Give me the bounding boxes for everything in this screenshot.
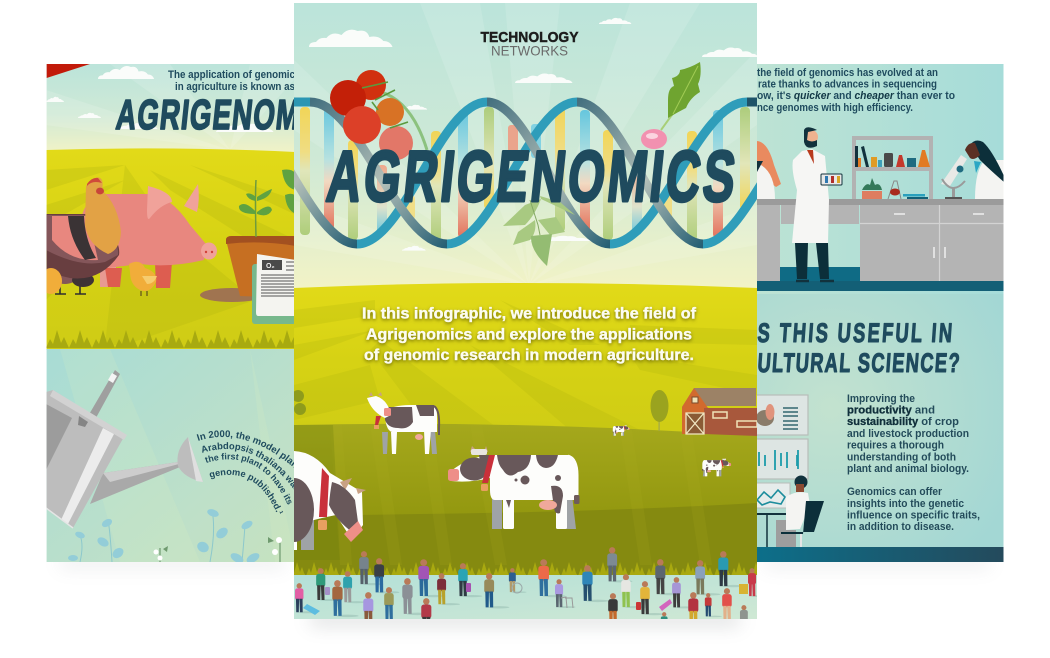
right intro text xyxy=(757,67,955,114)
left field stripes xyxy=(46,165,296,345)
right body text: Genomics can offer xyxy=(847,486,943,498)
book xyxy=(252,254,296,324)
curved caption text: genome published.¹ xyxy=(210,470,284,514)
curved caption text: Arabdopsis thaliana was xyxy=(202,442,294,490)
right body text: productivity and xyxy=(847,405,935,417)
right body text: understanding of both xyxy=(847,451,956,463)
left clouds xyxy=(46,66,274,132)
left bottom section background xyxy=(46,349,296,563)
DNA rungs xyxy=(300,107,750,241)
floor with crowd xyxy=(294,575,757,620)
field stripes xyxy=(294,300,757,430)
logo: Technology Networks: NETWORKS xyxy=(491,42,568,58)
potted plant xyxy=(862,178,928,200)
cow: distant xyxy=(613,425,630,436)
left intro text: The application of genomic xyxy=(168,69,295,81)
plant pot xyxy=(200,170,296,302)
cow: small right xyxy=(702,458,731,476)
lab bench xyxy=(756,199,1004,281)
right body text xyxy=(847,393,980,533)
cow: grazing lower left xyxy=(274,451,366,550)
right body text: influence on specific traits, xyxy=(847,509,980,521)
left grass xyxy=(46,330,294,348)
hanging leaves xyxy=(503,196,575,266)
right footer band xyxy=(756,547,1004,562)
right intro text: the field of genomics has evolved at an xyxy=(757,67,938,79)
curved caption text: the first plant to have its xyxy=(204,452,292,504)
pig xyxy=(78,184,217,288)
left intro text: in agriculture is known as xyxy=(175,81,295,93)
left title: AGRIGENOMICS xyxy=(114,91,351,138)
left shade on field xyxy=(294,425,340,560)
panel: centre cover page xyxy=(225,3,770,636)
right body text: and livestock production xyxy=(847,428,969,440)
right intro text: nce genomes with high efficiency. xyxy=(757,102,913,114)
intro paragraph xyxy=(362,306,697,364)
panel: right page xyxy=(752,64,1004,562)
watering can xyxy=(46,370,203,528)
bottom rays xyxy=(60,349,296,562)
scientist at microscope xyxy=(965,141,1004,199)
monitor: turkey xyxy=(752,395,808,435)
curved caption text xyxy=(196,430,294,514)
lab shelf xyxy=(852,136,933,199)
monitor: molecule xyxy=(752,483,790,508)
blue plants xyxy=(68,508,261,565)
panel: left page xyxy=(46,64,294,562)
upper yellow field xyxy=(294,283,757,440)
intro paragraph: In this infographic, we introduce the field of xyxy=(362,306,697,322)
curved caption text: In 2000, the model plant xyxy=(196,430,294,468)
chicks xyxy=(40,262,157,296)
right body text: in addition to disease. xyxy=(847,521,954,533)
left intro text xyxy=(168,69,295,93)
right heading: ULTURAL SCIENCE? xyxy=(757,347,961,378)
left sky xyxy=(46,64,296,154)
right body text: Improving the xyxy=(847,393,915,405)
right intro text: ow, it's quicker and cheaper than ever to xyxy=(757,90,955,102)
right heading: S THIS USEFUL IN xyxy=(757,317,953,348)
DNA helix xyxy=(225,102,770,244)
cow: top left xyxy=(367,392,439,454)
scientist holding tablet xyxy=(792,127,842,281)
centre sky xyxy=(294,3,757,288)
scientist with red hair xyxy=(757,141,781,199)
microscope xyxy=(941,155,967,199)
tree xyxy=(650,390,668,431)
red corner ribbon xyxy=(47,64,90,78)
logo: Technology Networks: TECHNOLOGY xyxy=(480,30,579,46)
right body text: plant and animal biology. xyxy=(847,463,969,475)
white flowers xyxy=(154,537,282,562)
cow: large centre xyxy=(448,446,580,529)
green field band xyxy=(294,424,757,520)
desk scientist xyxy=(757,476,824,547)
right heading xyxy=(758,322,960,373)
hen xyxy=(85,177,121,254)
crowd of people xyxy=(295,547,769,636)
turkey xyxy=(46,214,119,294)
lab floor xyxy=(756,267,1004,291)
barn xyxy=(682,388,757,436)
book: O₂ xyxy=(266,263,275,270)
tree left edge xyxy=(292,390,306,415)
monitor: gene chart xyxy=(752,439,808,479)
luggage and props xyxy=(303,583,748,615)
left sun rays xyxy=(110,64,294,78)
sun rays xyxy=(294,3,757,285)
right body text: insights into the genetic xyxy=(847,498,964,510)
intro paragraph: of genomic research in modern agriculture. xyxy=(364,347,694,364)
main title: AGRIGENOMICS xyxy=(323,136,739,216)
clouds xyxy=(309,18,758,251)
lower field band xyxy=(294,503,757,580)
left field xyxy=(46,148,296,350)
grass edge xyxy=(294,561,757,576)
right bottom background xyxy=(756,294,1004,548)
right body text: sustainability of crop xyxy=(847,416,959,428)
right body text: requires a thorough xyxy=(847,440,944,452)
page shadows xyxy=(60,556,990,626)
intro paragraph: Agrigenomics and explore the applications xyxy=(366,326,692,344)
right intro text: rate thanks to advances in sequencing xyxy=(758,78,937,90)
radish with leaf xyxy=(641,62,701,149)
field furrows xyxy=(330,425,712,565)
tomatoes xyxy=(330,70,427,160)
right lab background xyxy=(756,64,1004,298)
logo: Technology Networks xyxy=(480,30,579,58)
